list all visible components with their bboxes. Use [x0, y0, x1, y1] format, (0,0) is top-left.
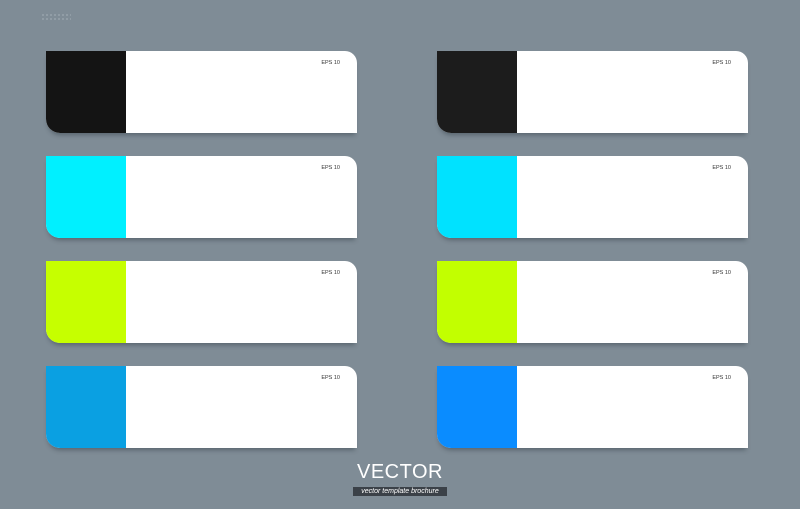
card: right 3 lime: [437, 261, 748, 343]
card: left 4 blue: EPS 10: [321, 375, 340, 381]
card: left 2 cyan: EPS 10: [321, 165, 340, 171]
card: left 1 black: EPS 10: [321, 60, 340, 66]
card: left 1 black: [46, 51, 357, 133]
card: left 2 cyan: [46, 156, 357, 238]
card: left 3 lime: [46, 261, 357, 343]
title: VECTOR: VECTOR: [357, 461, 443, 483]
card: right 1 black: EPS 10: [712, 60, 731, 66]
card: right 3 lime: EPS 10: [712, 270, 731, 276]
card: left 3 lime: EPS 10: [321, 270, 340, 276]
subtitle: vector template brochure: [361, 488, 439, 495]
card: right 4 blue: [437, 366, 748, 448]
card: right 4 blue: EPS 10: [712, 375, 731, 381]
card: right 2 cyan: EPS 10: [712, 165, 731, 171]
card: right 2 cyan: [437, 156, 748, 238]
card: right 1 black: [437, 51, 748, 133]
card: left 4 blue: [46, 366, 357, 448]
subtitle: [353, 487, 447, 496]
